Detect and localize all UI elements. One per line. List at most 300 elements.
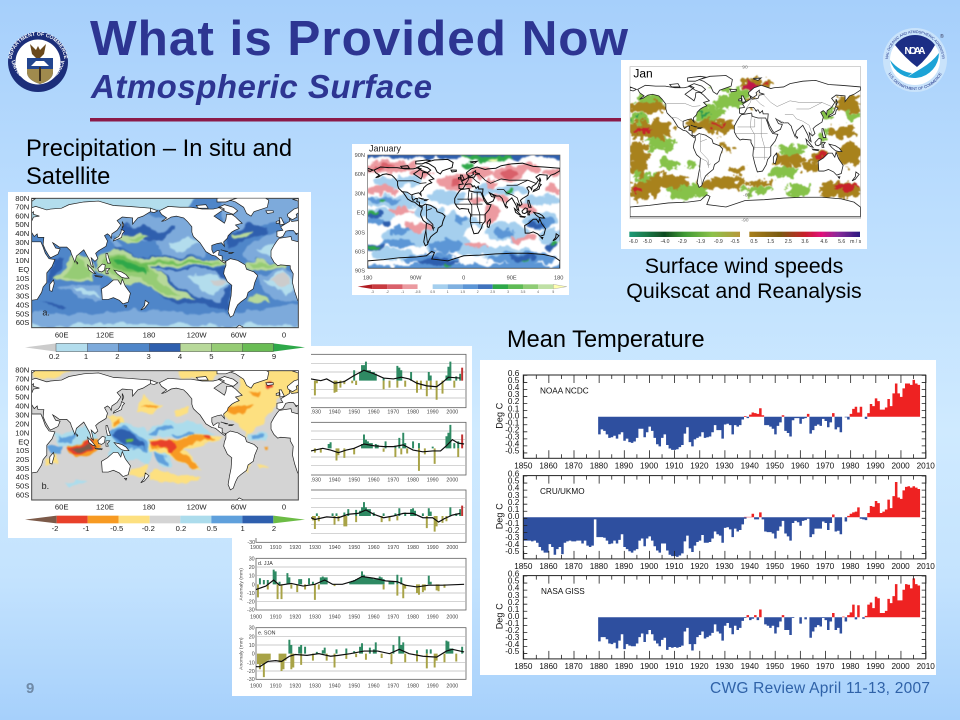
map b: precipitation anomaly: 20N bbox=[15, 419, 29, 428]
axis labels under third chart: 1920 bbox=[289, 545, 301, 551]
bar chart: e. SON: 1960 bbox=[368, 684, 380, 690]
axis labels under third chart: 1970 bbox=[387, 410, 399, 416]
map a: mean precipitation: 30N bbox=[15, 238, 29, 247]
panel: surface wind speed map: -90 bbox=[741, 218, 749, 224]
colour legend January: 3 bbox=[507, 290, 509, 294]
colour legend January: 0.5 bbox=[430, 290, 435, 294]
bar chart: e. SON: e. SON bbox=[258, 630, 276, 636]
map b: precipitation anomaly: 10N bbox=[15, 428, 29, 437]
panel: surface wind speed map: -60 bbox=[743, 192, 750, 198]
colour legend a: 5 bbox=[209, 352, 213, 361]
chart: CRU/UKMO: -0.5 bbox=[505, 547, 520, 556]
colour legend wind: 5.6 bbox=[838, 239, 845, 245]
map a: mean precipitation: 50S bbox=[16, 309, 29, 318]
colour legend b: -2 bbox=[52, 524, 58, 533]
map b: precipitation anomaly: b. bbox=[42, 481, 49, 491]
panel: January anomaly map: 90S bbox=[355, 269, 365, 275]
map b: precipitation anomaly: 10S bbox=[16, 446, 29, 455]
map b: precipitation anomaly: 120E bbox=[96, 503, 114, 512]
colour legend wind: -1.9 bbox=[696, 239, 705, 245]
map b: precipitation anomaly: 30N bbox=[15, 410, 29, 419]
bar chart: d. JJA: 1930 bbox=[309, 614, 321, 620]
chart: CRU/UKMO: 0.4 bbox=[508, 484, 520, 493]
chart: CRU/UKMO: 1960 bbox=[791, 562, 810, 571]
caption: surface wind speeds: Quikscat and Reanalysis bbox=[626, 279, 862, 303]
colour legend wind: 1.5 bbox=[767, 239, 774, 245]
bar chart: d. JJA: 1970 bbox=[387, 614, 399, 620]
map b: precipitation anomaly: 50N bbox=[15, 392, 29, 401]
chart: NASA GISS: 1860 bbox=[539, 662, 558, 671]
bar chart: e. SON: 1980 bbox=[407, 684, 419, 690]
panel: January anomaly map bbox=[352, 144, 569, 295]
chart: NOAA NCDC: 0.3 bbox=[508, 390, 520, 399]
bar chart: e. SON: 1930 bbox=[309, 684, 321, 690]
bar chart: e. SON: 2000 bbox=[446, 684, 458, 690]
bar chart: third season bbox=[247, 490, 466, 546]
chart: NASA GISS: 1880 bbox=[590, 662, 608, 671]
chart: CRU/UKMO: 1910 bbox=[665, 562, 684, 571]
colour legend b bbox=[25, 516, 305, 533]
chart: NASA GISS: 1930 bbox=[715, 662, 734, 671]
chart: NOAA NCDC: 1980 bbox=[841, 461, 860, 470]
map b: precipitation anomaly: 20S bbox=[16, 455, 29, 464]
chart: NOAA NCDC: Deg C bbox=[494, 402, 504, 429]
chart: CRU/UKMO: 1920 bbox=[690, 562, 709, 571]
panel: January anomaly map: 60S bbox=[355, 250, 365, 256]
axis labels under third chart: 1980 bbox=[407, 545, 419, 551]
axis labels under third chart: 1930 bbox=[309, 478, 321, 484]
colour legend January: 2.5 bbox=[490, 290, 495, 294]
chart: CRU/UKMO: 1940 bbox=[741, 562, 759, 571]
colour legend wind: -5.0 bbox=[643, 239, 652, 245]
colour legend January: -3 bbox=[371, 290, 374, 294]
bar chart: d. JJA: 1900 bbox=[250, 614, 262, 620]
colour legend wind: -0.9 bbox=[714, 239, 723, 245]
chart: NOAA NCDC: 1940 bbox=[741, 461, 759, 470]
panel: January anomaly map: 90N bbox=[355, 153, 365, 159]
axis labels under third chart: 1960 bbox=[368, 410, 380, 416]
axis labels under third chart: 1960 bbox=[368, 545, 380, 551]
map a: mean precipitation: 20S bbox=[16, 283, 29, 292]
colour legend b: 0.5 bbox=[207, 524, 217, 533]
chart: NASA GISS: NASA GISS bbox=[541, 587, 585, 596]
panel: surface wind speed map bbox=[621, 60, 867, 249]
bar chart: d. JJA: 1910 bbox=[270, 614, 282, 620]
slide number: 9 bbox=[26, 680, 34, 697]
panel: January anomaly map: 90W bbox=[410, 276, 422, 282]
chart: NASA GISS: 0.1 bbox=[508, 605, 520, 614]
chart: CRU/UKMO: 0.5 bbox=[508, 477, 520, 486]
chart: NOAA NCDC: -0.3 bbox=[505, 433, 520, 442]
bar chart: d. JJA: 1940 bbox=[329, 614, 341, 620]
colour legend wind: -4.0 bbox=[661, 239, 670, 245]
chart: CRU/UKMO: 1950 bbox=[766, 562, 784, 571]
chart: NOAA NCDC: 1910 bbox=[665, 461, 684, 470]
chart: NOAA NCDC bbox=[494, 369, 935, 470]
bar chart: d. JJA: 1990 bbox=[427, 614, 439, 620]
chart: NOAA NCDC: 1990 bbox=[866, 461, 885, 470]
axis labels under third chart: 2000 bbox=[446, 478, 458, 484]
axis labels under third chart: 1910 bbox=[270, 545, 282, 551]
colour legend wind: 3.6 bbox=[801, 239, 809, 245]
chart: NASA GISS: -0.5 bbox=[505, 647, 520, 656]
bar chart: e. SON: -30 bbox=[247, 677, 255, 683]
map b: precipitation anomaly: EQ bbox=[18, 437, 29, 446]
chart: NOAA NCDC: -0.5 bbox=[505, 447, 520, 456]
map a: mean precipitation: 60W bbox=[231, 331, 247, 340]
axis labels under third chart: 2000 bbox=[446, 545, 458, 551]
map a: mean precipitation: 60E bbox=[55, 331, 68, 340]
bar chart: d. JJA: -20 bbox=[247, 600, 255, 606]
bar chart: e. SON: 1900 bbox=[250, 684, 262, 690]
panel: surface wind speed map: 90 bbox=[742, 64, 748, 70]
chart: NOAA NCDC: 2000 bbox=[891, 461, 910, 470]
colour legend wind: -6.0 bbox=[629, 239, 638, 245]
bar chart: d. JJA: Anomaly (mm) bbox=[239, 568, 245, 601]
chart: CRU/UKMO: CRU/UKMO bbox=[540, 487, 585, 496]
colour legend b: 0.2 bbox=[176, 524, 186, 533]
chart: NASA GISS: 1970 bbox=[816, 662, 835, 671]
map b: precipitation anomaly bbox=[15, 368, 305, 531]
chart: NASA GISS: 1990 bbox=[866, 662, 885, 671]
chart: NASA GISS: 0.2 bbox=[508, 598, 520, 607]
chart: NASA GISS: 1850 bbox=[514, 662, 533, 671]
bar chart: d. JJA: 1920 bbox=[289, 614, 301, 620]
axis labels under third chart: 1950 bbox=[348, 478, 360, 484]
colour legend January: 2 bbox=[477, 290, 479, 294]
chart: NASA GISS: -0.3 bbox=[505, 633, 520, 642]
bar chart: top season bbox=[256, 354, 466, 408]
axis labels under third chart: 1950 bbox=[348, 545, 360, 551]
map a: mean precipitation: 20N bbox=[15, 247, 29, 256]
caption: surface wind speeds bbox=[626, 254, 862, 303]
chart: NOAA NCDC: 1850 bbox=[514, 461, 533, 470]
colour legend wind: -0.5 bbox=[731, 239, 740, 245]
bar chart: e. SON: 1910 bbox=[270, 684, 282, 690]
map a: mean precipitation: 60N bbox=[15, 211, 29, 220]
bar chart: e. SON: 1940 bbox=[329, 684, 341, 690]
chart: CRU/UKMO: 1860 bbox=[539, 562, 558, 571]
chart: NOAA NCDC: 0.4 bbox=[508, 383, 520, 392]
map b: precipitation anomaly: 40S bbox=[16, 473, 29, 482]
heading: precipitation: Satellite bbox=[26, 164, 110, 190]
axis labels under third chart: 1990 bbox=[427, 410, 439, 416]
chart: CRU/UKMO: 1890 bbox=[615, 562, 633, 571]
colour legend b: -1 bbox=[83, 524, 89, 533]
chart: NOAA NCDC: 1930 bbox=[715, 461, 734, 470]
chart: NOAA NCDC: 0.5 bbox=[508, 376, 520, 385]
panel: seasonal precipitation anomaly bar charts bbox=[232, 346, 472, 696]
subtitle: Atmospheric Surface bbox=[90, 68, 432, 105]
caption: surface wind speeds: Surface wind speeds bbox=[645, 254, 843, 278]
map a: mean precipitation: 180 bbox=[143, 331, 155, 340]
title rule bbox=[90, 118, 622, 122]
chart: NOAA NCDC: 1960 bbox=[791, 461, 810, 470]
chart: NOAA NCDC: 2010 bbox=[917, 461, 935, 470]
chart: NASA GISS: 1980 bbox=[841, 662, 860, 671]
panel: January anomaly map: 60N bbox=[355, 172, 365, 178]
map a: mean precipitation: 10N bbox=[15, 256, 29, 265]
bar chart: d. JJA: 2000 bbox=[446, 614, 458, 620]
chart: NASA GISS: 1950 bbox=[766, 662, 784, 671]
icon: NOAA logo bbox=[883, 28, 947, 92]
chart: NOAA NCDC: -0.1 bbox=[505, 418, 520, 427]
map b: precipitation anomaly: 60W bbox=[231, 503, 247, 512]
map b: precipitation anomaly: 0 bbox=[282, 503, 286, 512]
map b: precipitation anomaly: 60N bbox=[15, 384, 29, 393]
chart: CRU/UKMO: -0.2 bbox=[505, 526, 520, 535]
colour legend January: -1 bbox=[401, 290, 404, 294]
colour legend January: -2 bbox=[386, 290, 389, 294]
colour legend b: 1 bbox=[241, 524, 245, 533]
axis labels under third chart: 1930 bbox=[309, 410, 321, 416]
bar chart: e. SON: 20 bbox=[249, 634, 255, 640]
panel: January anomaly map: 30N bbox=[355, 191, 365, 197]
colour legend a bbox=[25, 343, 305, 361]
colour legend wind: 0.5 bbox=[750, 239, 758, 245]
chart: NASA GISS: 1890 bbox=[615, 662, 633, 671]
footer text: CWG Review April 11-13, 2007 bbox=[710, 680, 930, 697]
chart: NASA GISS: 0.6 bbox=[508, 570, 520, 579]
map a: mean precipitation: 0 bbox=[282, 331, 286, 340]
bar chart: e. SON: 1990 bbox=[427, 684, 439, 690]
chart: NASA GISS: -0.4 bbox=[505, 640, 520, 649]
colour legend a: 4 bbox=[178, 352, 183, 361]
chart: CRU/UKMO: 1930 bbox=[715, 562, 734, 571]
axis labels under third chart: 1980 bbox=[407, 478, 419, 484]
chart: NASA GISS: 0.4 bbox=[508, 584, 520, 593]
chart: NASA GISS: 1920 bbox=[690, 662, 709, 671]
colour legend January: 1 bbox=[447, 290, 449, 294]
icon: Department of Commerce seal bbox=[8, 32, 68, 92]
map a: mean precipitation: 80N bbox=[15, 194, 29, 203]
panel: January anomaly map: 0 bbox=[462, 276, 465, 282]
chart: NASA GISS: 1900 bbox=[640, 662, 659, 671]
map b: precipitation anomaly: 50S bbox=[16, 482, 29, 491]
colour legend b: -0.5 bbox=[110, 524, 123, 533]
axis labels under third chart: 2000 bbox=[446, 410, 458, 416]
chart: NOAA NCDC: -0.2 bbox=[505, 425, 520, 434]
bar chart: e. SON bbox=[239, 626, 466, 690]
icon: NOAA logo: ® bbox=[940, 33, 944, 40]
bar chart: second season bbox=[256, 422, 466, 475]
chart: NASA GISS: 1960 bbox=[791, 662, 810, 671]
panel: precipitation maps bbox=[8, 192, 311, 538]
chart: CRU/UKMO: 1900 bbox=[640, 562, 659, 571]
map a: mean precipitation: 60S bbox=[16, 318, 29, 327]
bar chart: third season: -30 bbox=[247, 540, 255, 546]
panel: January anomaly map: EQ bbox=[357, 211, 366, 217]
colour legend b: 2 bbox=[272, 524, 276, 533]
colour legend January: 5 bbox=[552, 290, 554, 294]
axis labels under third chart: 1970 bbox=[387, 545, 399, 551]
bar chart: e. SON: 0 bbox=[252, 652, 255, 658]
chart: CRU/UKMO: 2000 bbox=[891, 562, 910, 571]
axis labels under third chart: 1940 bbox=[329, 410, 341, 416]
chart: CRU/UKMO: 1850 bbox=[514, 562, 533, 571]
axis labels under third chart: 1940 bbox=[329, 478, 341, 484]
panel: January anomaly map: 180 bbox=[363, 276, 372, 282]
map b: precipitation anomaly: 60S bbox=[16, 491, 29, 500]
colour legend wind: 2.5 bbox=[785, 239, 792, 245]
bar chart: e. SON: 1950 bbox=[348, 684, 360, 690]
bar chart: e. SON: Anomaly (mm) bbox=[239, 637, 245, 670]
panel: January anomaly map: January bbox=[369, 144, 401, 154]
axis labels under third chart: 1930 bbox=[309, 545, 321, 551]
map a: mean precipitation: 30S bbox=[16, 292, 29, 301]
bar chart: e. SON: 10 bbox=[249, 643, 255, 649]
bar chart: e. SON: 30 bbox=[249, 626, 255, 632]
panel: January anomaly map: 180 bbox=[554, 276, 563, 282]
axis labels under third chart bbox=[250, 410, 458, 551]
axis labels under third chart: 1990 bbox=[427, 478, 439, 484]
chart: NOAA NCDC: 0.6 bbox=[508, 369, 520, 378]
bar chart: d. JJA: 10 bbox=[249, 574, 255, 580]
chart: NASA GISS: 1940 bbox=[741, 662, 759, 671]
bar chart: d. JJA bbox=[239, 556, 466, 620]
chart: NASA GISS: -0.1 bbox=[505, 619, 520, 628]
bar chart: e. SON: 1970 bbox=[387, 684, 399, 690]
chart: NASA GISS: 1910 bbox=[665, 662, 684, 671]
heading: precipitation: Precipitation – In situ and bbox=[26, 136, 292, 162]
colour legend wind: 4.6 bbox=[820, 239, 828, 245]
map a: mean precipitation: 70N bbox=[15, 202, 29, 211]
map b: precipitation anomaly: 60E bbox=[55, 503, 68, 512]
chart: NOAA NCDC: 1880 bbox=[590, 461, 608, 470]
bar chart: d. JJA: 0 bbox=[252, 582, 255, 588]
chart: NASA GISS: -0.2 bbox=[505, 626, 520, 635]
chart: NASA GISS: 0.5 bbox=[508, 577, 520, 586]
bar chart: d. JJA: 1980 bbox=[407, 614, 419, 620]
chart: CRU/UKMO: -0.4 bbox=[505, 540, 520, 549]
title: What is Provided Now bbox=[90, 11, 628, 66]
chart: NASA GISS: 1870 bbox=[564, 662, 583, 671]
colour legend January: 1.5 bbox=[460, 290, 465, 294]
axis labels under third chart: 1960 bbox=[368, 478, 380, 484]
chart: CRU/UKMO: Deg C bbox=[494, 503, 504, 529]
axis labels under third chart: 1980 bbox=[407, 410, 419, 416]
colour legend January bbox=[358, 284, 567, 294]
chart: CRU/UKMO: 0.6 bbox=[508, 470, 520, 479]
colour legend a: 1 bbox=[84, 352, 88, 361]
colour legend wind: -2.9 bbox=[678, 239, 687, 245]
colour legend January: -0.5 bbox=[415, 290, 421, 294]
chart: NOAA NCDC: 1870 bbox=[564, 461, 583, 470]
axis labels under third chart: 1940 bbox=[329, 545, 341, 551]
map a: mean precipitation: a. bbox=[42, 308, 50, 318]
map b: precipitation anomaly: 180 bbox=[143, 503, 155, 512]
map b: precipitation anomaly: 70N bbox=[15, 375, 29, 384]
chart: NOAA NCDC: NOAA NCDC bbox=[540, 386, 589, 395]
colour legend January: 4 bbox=[537, 290, 539, 294]
chart: CRU/UKMO: 1980 bbox=[841, 562, 860, 571]
axis labels under third chart: 1990 bbox=[427, 545, 439, 551]
colour legend a: 2 bbox=[115, 352, 119, 361]
map a: mean precipitation: 120E bbox=[96, 331, 114, 340]
chart: NOAA NCDC: 0.0 bbox=[508, 411, 520, 420]
bar chart: d. JJA: d. JJA bbox=[258, 561, 273, 567]
axis labels under third chart: 1900 bbox=[250, 545, 262, 551]
colour legend b: -0.2 bbox=[142, 524, 155, 533]
chart: CRU/UKMO: 0.3 bbox=[508, 491, 520, 500]
colour legend a: 0.2 bbox=[49, 352, 60, 361]
chart: CRU/UKMO: 1880 bbox=[590, 562, 608, 571]
axis labels under third chart: 1950 bbox=[348, 410, 360, 416]
map a: mean precipitation: 40S bbox=[16, 300, 29, 309]
panel: January anomaly map: 90E bbox=[507, 276, 517, 282]
chart: CRU/UKMO: 1970 bbox=[816, 562, 835, 571]
icon: Department of Commerce seal: DEPARTMENT OF COMMERCE bbox=[8, 32, 68, 59]
bar chart: e. SON: 1920 bbox=[289, 684, 301, 690]
chart: NOAA NCDC: 1970 bbox=[816, 461, 835, 470]
chart: NOAA NCDC: 0.1 bbox=[508, 404, 520, 413]
colour legend a: 3 bbox=[147, 352, 151, 361]
chart: CRU/UKMO: -0.3 bbox=[505, 533, 520, 542]
chart: CRU/UKMO: 1870 bbox=[564, 562, 583, 571]
map b: precipitation anomaly: 80N bbox=[15, 366, 29, 375]
chart: NOAA NCDC: 1920 bbox=[690, 461, 709, 470]
icon: Department of Commerce seal: UNITED STATES OF AMERICA bbox=[12, 60, 65, 80]
chart: CRU/UKMO bbox=[494, 470, 935, 571]
map a: mean precipitation: 50N bbox=[15, 220, 29, 229]
chart: NASA GISS: 0.3 bbox=[508, 591, 520, 600]
colour legend wind bbox=[629, 232, 862, 245]
chart: NOAA NCDC: 1860 bbox=[539, 461, 558, 470]
map b: precipitation anomaly: 120W bbox=[187, 503, 207, 512]
colour legend a: 7 bbox=[241, 352, 245, 361]
heading: precipitation bbox=[26, 136, 292, 190]
chart: NASA GISS: 2000 bbox=[891, 662, 910, 671]
map a: mean precipitation: 120W bbox=[187, 331, 207, 340]
map a: mean precipitation: 10S bbox=[16, 274, 29, 283]
chart: NASA GISS bbox=[494, 570, 935, 671]
bar chart: d. JJA: -30 bbox=[247, 608, 255, 614]
icon: NOAA logo: U.S. DEPARTMENT OF COMMERCE bbox=[888, 72, 942, 90]
chart: CRU/UKMO: -0.1 bbox=[505, 519, 520, 528]
bar chart: d. JJA: 1950 bbox=[348, 614, 360, 620]
colour legend wind: m / s bbox=[850, 239, 862, 245]
colour legend a: 9 bbox=[272, 352, 276, 361]
chart: NASA GISS: Deg C bbox=[494, 603, 504, 629]
chart: NOAA NCDC: 1950 bbox=[766, 461, 784, 470]
chart: CRU/UKMO: 0.1 bbox=[508, 505, 520, 514]
map b: precipitation anomaly: 30S bbox=[16, 464, 29, 473]
axis labels under third chart: 1970 bbox=[387, 478, 399, 484]
icon: NOAA logo: NOAA bbox=[904, 46, 926, 57]
panel: January anomaly map: 30S bbox=[355, 230, 365, 236]
chart: NASA GISS: 2010 bbox=[917, 662, 935, 671]
chart: NOAA NCDC: 0.2 bbox=[508, 397, 520, 406]
map a: mean precipitation bbox=[15, 196, 305, 359]
chart: CRU/UKMO: 0.0 bbox=[508, 512, 520, 521]
bar chart: d. JJA: 30 bbox=[249, 556, 255, 562]
panel: surface wind speed map: Jan bbox=[633, 67, 653, 81]
bar chart: d. JJA: -10 bbox=[247, 591, 255, 597]
chart: CRU/UKMO: 2010 bbox=[917, 562, 935, 571]
bar chart: d. JJA: 1960 bbox=[368, 614, 380, 620]
map b: precipitation anomaly: 40N bbox=[15, 401, 29, 410]
bar chart: d. JJA: 20 bbox=[249, 565, 255, 571]
heading: mean temperature: Mean Temperature bbox=[507, 327, 705, 353]
panel: mean temperature charts bbox=[480, 360, 936, 675]
colour legend January: 3.5 bbox=[521, 290, 525, 294]
chart: NASA GISS: 0.0 bbox=[508, 612, 520, 621]
chart: NOAA NCDC: 1890 bbox=[615, 461, 633, 470]
map a: mean precipitation: EQ bbox=[18, 265, 29, 274]
chart: NOAA NCDC: -0.4 bbox=[505, 440, 520, 449]
map a: mean precipitation: 40N bbox=[15, 229, 29, 238]
chart: NOAA NCDC: 1900 bbox=[640, 461, 659, 470]
